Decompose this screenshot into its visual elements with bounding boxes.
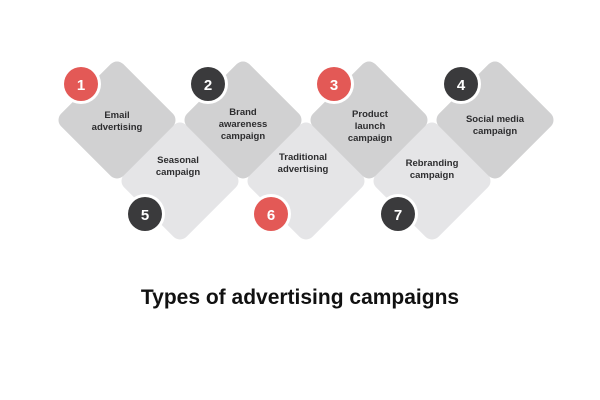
tile 7: [370, 119, 494, 243]
labels: campaign: [348, 133, 392, 144]
number circles: 2: [204, 77, 212, 94]
number circles: 6: [267, 207, 275, 224]
labels: Seasonal: [157, 155, 199, 166]
number circles: [61, 64, 481, 234]
labels: campaign: [473, 126, 517, 137]
labels: Traditional: [279, 152, 327, 163]
number circles: 4: [457, 77, 466, 94]
tile 2: [181, 58, 305, 182]
tile 1: [55, 58, 179, 182]
number circles: 3: [330, 77, 338, 94]
labels: campaign: [410, 170, 454, 181]
labels: launch: [355, 121, 385, 132]
tile 4: [433, 58, 557, 182]
title: Types of advertising campaigns: [141, 286, 459, 309]
number circles: 1: [77, 77, 85, 94]
labels: campaign: [221, 131, 265, 142]
number circles: 5: [141, 207, 149, 224]
labels: Social media: [466, 114, 525, 125]
labels: Brand: [229, 107, 257, 118]
tile 3: [307, 58, 431, 182]
tile 6: [244, 119, 368, 243]
labels: campaign: [156, 167, 200, 178]
labels: Product: [352, 109, 389, 120]
labels: awareness: [219, 119, 267, 130]
labels: advertising: [92, 122, 143, 133]
labels: advertising: [278, 164, 329, 175]
labels: [92, 107, 525, 181]
tile 5: [118, 119, 242, 243]
number circles: 7: [394, 207, 402, 224]
labels: Email: [104, 110, 130, 121]
labels: Rebranding: [406, 158, 459, 169]
